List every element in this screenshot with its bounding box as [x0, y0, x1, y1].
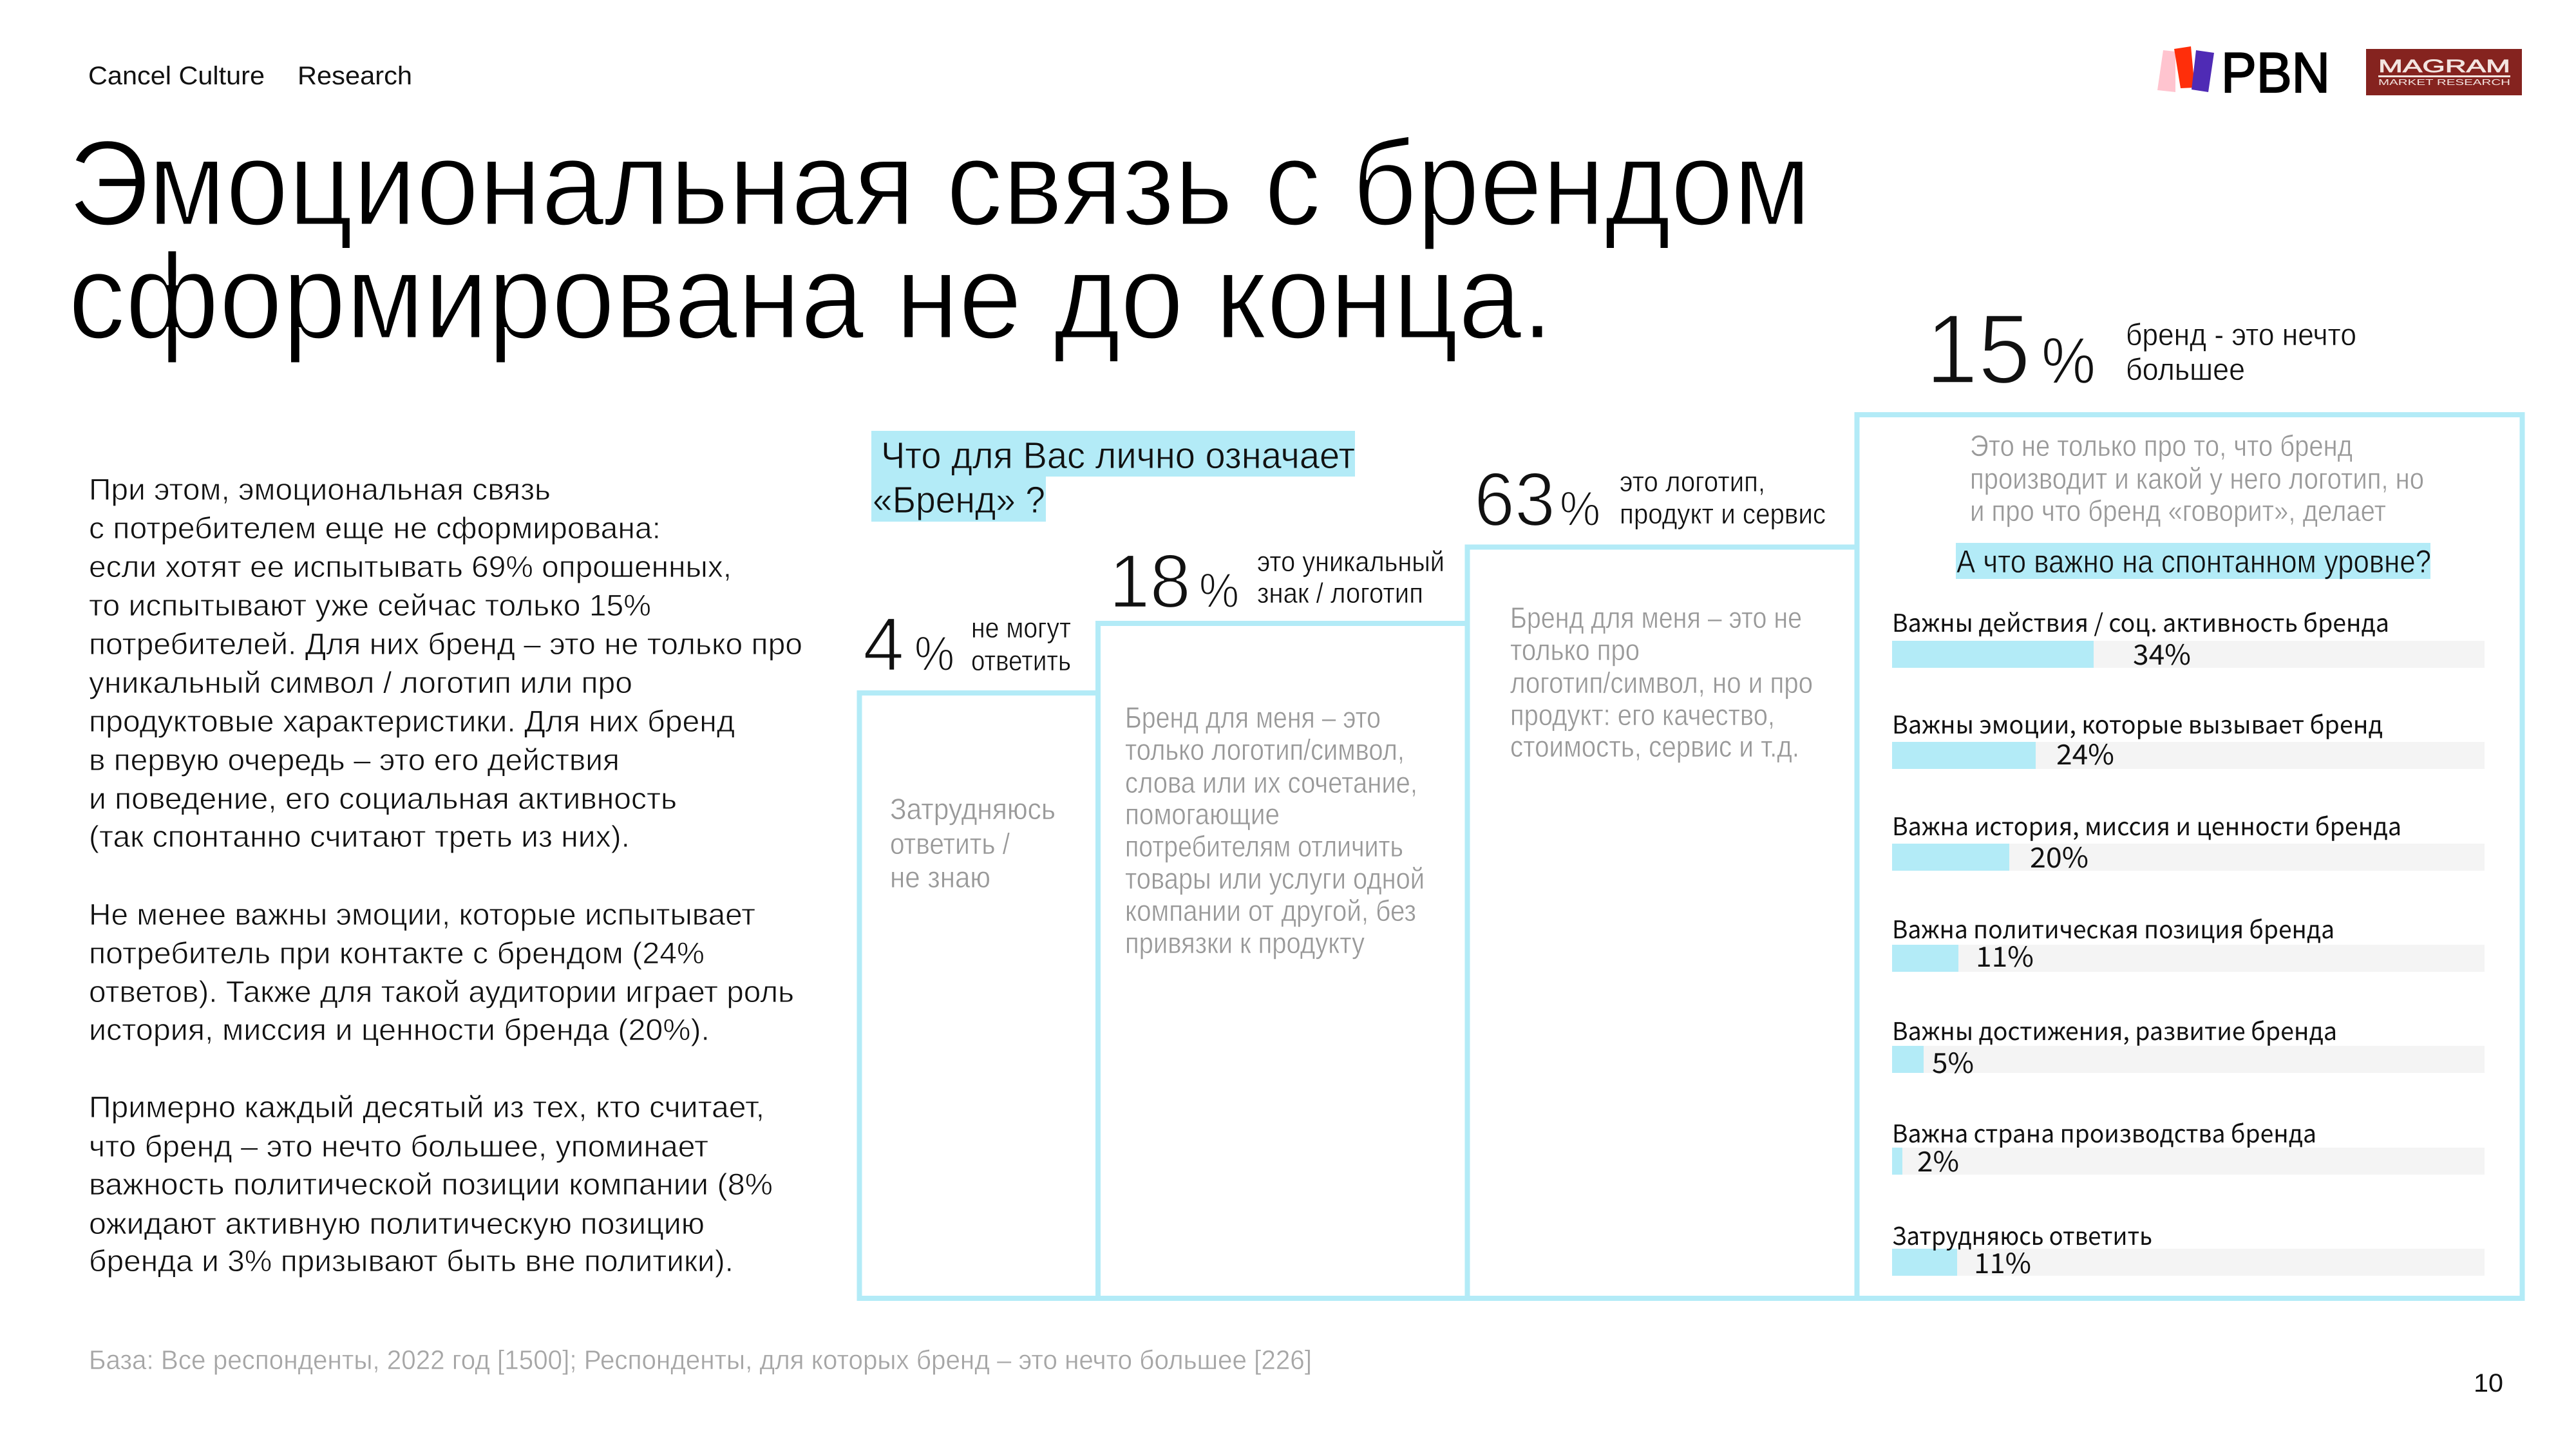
- panel: 63% logo, product and service: 63: [1474, 457, 1555, 542]
- bar: hard to answer 11%: 11%: [1974, 1242, 2031, 1282]
- bar: hard to answer 11%: Затрудняюсь ответить: [1892, 1217, 2152, 1252]
- panel: 15% brand is something bigger: бренд - это нечто: [2126, 318, 2356, 352]
- bar: achievements 5%: 5%: [1932, 1041, 1974, 1081]
- bar: emotions 24%: 24%: [2056, 733, 2114, 773]
- body text block: с потребителем еще не сформирована:: [89, 511, 661, 545]
- panel: 63% logo, product and service: продукт и сервис: [1620, 498, 1826, 530]
- bar: hard to answer 11%: [1892, 1217, 2485, 1282]
- panel: 18% unique sign or logo: [1098, 539, 1613, 1298]
- body text block: ответов). Также для такой аудитории играет роль: [89, 974, 794, 1009]
- panel: 63% logo, product and service: только про: [1510, 633, 1640, 667]
- body text block: потребитель при контакте с брендом (24%: [89, 936, 705, 970]
- panel: 63% logo, product and service: Бренд для меня – это не: [1510, 601, 1802, 634]
- header tags: Research: [298, 62, 412, 90]
- spontaneous question highlight: А что важно на спонтанном уровне?: [1956, 544, 2431, 580]
- title: Эмоциональная связь с брендом: [68, 115, 1811, 251]
- panel: 4% cannot answer: ответить: [971, 645, 1071, 677]
- panel: 15% brand is something bigger: производит и какой у него логотип, но: [1970, 462, 2424, 495]
- panel: 15% brand is something bigger: и про что бренд «говорит», делает: [1970, 494, 2386, 527]
- title: сформирована не до конца.: [68, 229, 1553, 364]
- panel: 4% cannot answer: [859, 602, 1503, 1298]
- bar: country of production 2%: Важна страна производства бренда: [1892, 1114, 2316, 1150]
- bar: country of production 2%: [1892, 1114, 2485, 1180]
- panel: 18% unique sign or logo: %: [1199, 564, 1239, 618]
- bar: country of production 2%: 2%: [1917, 1140, 1959, 1180]
- bar: achievements 5%: Важны достижения, развитие бренда: [1892, 1012, 2337, 1047]
- question highlight: [871, 431, 1355, 522]
- panel: 18% unique sign or logo: привязки к продукту: [1125, 926, 1365, 960]
- body text block: [89, 472, 802, 1278]
- logo: Magram Market Research: MAGRAM: [2378, 56, 2510, 76]
- body text block: в первую очередь – это его действия: [89, 743, 620, 777]
- body text block: история, миссия и ценности бренда (20%).: [89, 1012, 710, 1046]
- bar: political position 11%: 11%: [1976, 935, 2034, 975]
- body text block: если хотят ее испытывать 69% опрошенных,: [89, 549, 732, 583]
- bar: actions and social activity 34%: [1892, 603, 2485, 673]
- body text block: что бренд – это нечто большее, упоминает: [89, 1129, 708, 1163]
- title: [68, 115, 1811, 364]
- panel: 4% cannot answer: не могут: [971, 612, 1071, 644]
- bar: history, mission, values 20%: [1892, 807, 2485, 876]
- logo: PBN: PBN: [2221, 41, 2330, 104]
- panel: 15% brand is something bigger: большее: [2126, 353, 2245, 387]
- body text block: то испытывают уже сейчас только 15%: [89, 588, 651, 622]
- header tags: Cancel Culture: [88, 62, 265, 90]
- bar: achievements 5%: [1892, 1012, 2485, 1081]
- bar: political position 11%: [1892, 910, 2485, 975]
- body text block: и поведение, его социальная активность: [89, 781, 677, 815]
- logo: Magram Market Research: MARKET RESEARCH: [2378, 77, 2510, 87]
- panel: 63% logo, product and service: продукт: его качество,: [1510, 698, 1775, 732]
- panel: 4% cannot answer: %: [914, 627, 954, 681]
- header tags: [88, 62, 412, 90]
- body text block: продуктовые характеристики. Для них бренд: [89, 704, 735, 738]
- question highlight: «Бренд» ?: [873, 479, 1045, 521]
- panel: 15% brand is something bigger: %: [2041, 324, 2096, 397]
- body text block: важность политической позиции компании (8%: [89, 1167, 773, 1201]
- panel: 63% logo, product and service: [1467, 457, 1982, 1298]
- panel: 18% unique sign or logo: товары или услуги одной: [1125, 862, 1425, 895]
- panel: 15% brand is something bigger: Это не только про то, что бренд: [1970, 429, 2353, 462]
- body text block: уникальный символ / логотип или про: [89, 665, 632, 699]
- panel: 18% unique sign or logo: слова или их сочетание,: [1125, 766, 1417, 799]
- panel: 18% unique sign or logo: Бренд для меня – это: [1125, 701, 1381, 734]
- bar: emotions 24%: Важны эмоции, которые вызывает бренд: [1892, 705, 2383, 741]
- logo: Magram Market Research: [2366, 49, 2522, 95]
- panel: 63% logo, product and service: %: [1560, 482, 1600, 536]
- body text block: бренда и 3% призывают быть вне политики).: [89, 1244, 734, 1278]
- panel: 4% cannot answer: ответить /: [890, 827, 1010, 860]
- panel: 15% brand is something bigger: 15: [1926, 294, 2031, 404]
- panel: 63% logo, product and service: логотип/символ, но и про: [1510, 666, 1813, 699]
- logo: PBN: [2157, 41, 2330, 104]
- bar: emotions 24%: [1892, 705, 2485, 773]
- body text block: потребителей. Для них бренд – это не только про: [89, 627, 802, 661]
- panel: 18% unique sign or logo: знак / логотип: [1257, 578, 1423, 609]
- panel: 63% logo, product and service: это логотип,: [1620, 466, 1765, 498]
- body text block: ожидают активную политическую позицию: [89, 1206, 705, 1240]
- panel: 4% cannot answer: 4: [863, 602, 904, 687]
- bar: history, mission, values 20%: 20%: [2030, 836, 2088, 876]
- panel: 18% unique sign or logo: это уникальный: [1257, 546, 1444, 578]
- panel: 18% unique sign or logo: только логотип/символ,: [1125, 733, 1405, 766]
- page number: 10: [2474, 1369, 2503, 1397]
- bar: history, mission, values 20%: Важна история, миссия и ценности бренда: [1892, 807, 2401, 842]
- panel: 63% logo, product and service: стоимость, сервис и т.д.: [1510, 730, 1799, 763]
- panel: 15% brand is something bigger: [1857, 294, 2522, 1298]
- body text block: Примерно каждый десятый из тех, кто считает,: [89, 1090, 764, 1124]
- panel: 18% unique sign or logo: помогающие: [1125, 797, 1280, 831]
- bar: actions and social activity 34%: Важны действия / соц. активность бренда: [1892, 603, 2389, 639]
- bar: actions and social activity 34%: 34%: [2133, 633, 2191, 673]
- bar: political position 11%: Важна политическая позиция бренда: [1892, 910, 2334, 945]
- panel: 18% unique sign or logo: компании от другой, без: [1125, 894, 1416, 927]
- panel: 18% unique sign or logo: потребителям отличить: [1125, 829, 1403, 863]
- footnote: База: Все респонденты, 2022 год [1500]; Респонденты, для которых бренд – это нечто большее [226]: [89, 1345, 1312, 1375]
- panel: 4% cannot answer: не знаю: [890, 860, 990, 894]
- panel: 4% cannot answer: Затрудняюсь: [890, 792, 1056, 826]
- body text block: (так спонтанно считают треть из них).: [89, 819, 630, 853]
- question highlight: Что для Вас лично означает: [881, 435, 1355, 477]
- panel: 18% unique sign or logo: 18: [1109, 539, 1191, 624]
- body text block: При этом, эмоциональная связь: [89, 472, 551, 506]
- body text block: Не менее важны эмоции, которые испытывает: [89, 897, 755, 931]
